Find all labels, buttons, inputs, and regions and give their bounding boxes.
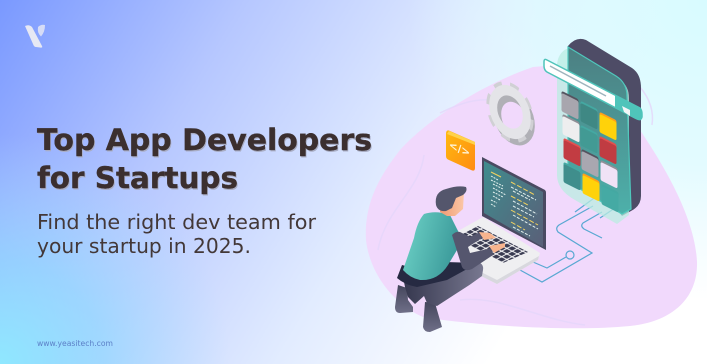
title: Top App Developers: [37, 123, 372, 157]
icon: code badge: </>: [449, 137, 470, 160]
title: for Startups: [38, 162, 239, 196]
laptop: [455, 157, 546, 284]
phone back: [568, 39, 641, 216]
waist shadow: [397, 262, 478, 287]
subtitle: your startup in 2025.: [37, 234, 251, 258]
shirt: [403, 212, 459, 280]
code lines: [491, 172, 538, 236]
pink blob: [366, 66, 697, 328]
subtitle: Find the right dev team for: [37, 210, 317, 234]
developer figure: [395, 186, 505, 332]
logo: [25, 25, 45, 48]
laptop base: [458, 217, 540, 284]
arm: [452, 232, 493, 270]
smartphone: [544, 39, 642, 224]
hair and cap: [436, 186, 467, 211]
shoes: [395, 285, 413, 313]
title: [37, 123, 373, 196]
circuit lines: [520, 196, 618, 282]
legs: [403, 262, 483, 306]
laptop screen: [482, 157, 546, 250]
icon: code badge: [446, 130, 475, 171]
face and neck: [440, 192, 464, 216]
subtitle: [37, 210, 317, 258]
keyboard: [455, 226, 528, 263]
glass panel: [557, 48, 629, 224]
search bar: [544, 59, 642, 120]
hands: [479, 232, 505, 253]
phone screen: [568, 47, 631, 214]
title: for Startups: [37, 161, 238, 195]
app tiles: [562, 91, 618, 213]
faint decorative curves: [378, 87, 652, 325]
website url: www.yeasitech.com: [37, 339, 113, 348]
title: Top App Developers: [38, 124, 373, 158]
icon: gear: [489, 79, 531, 145]
